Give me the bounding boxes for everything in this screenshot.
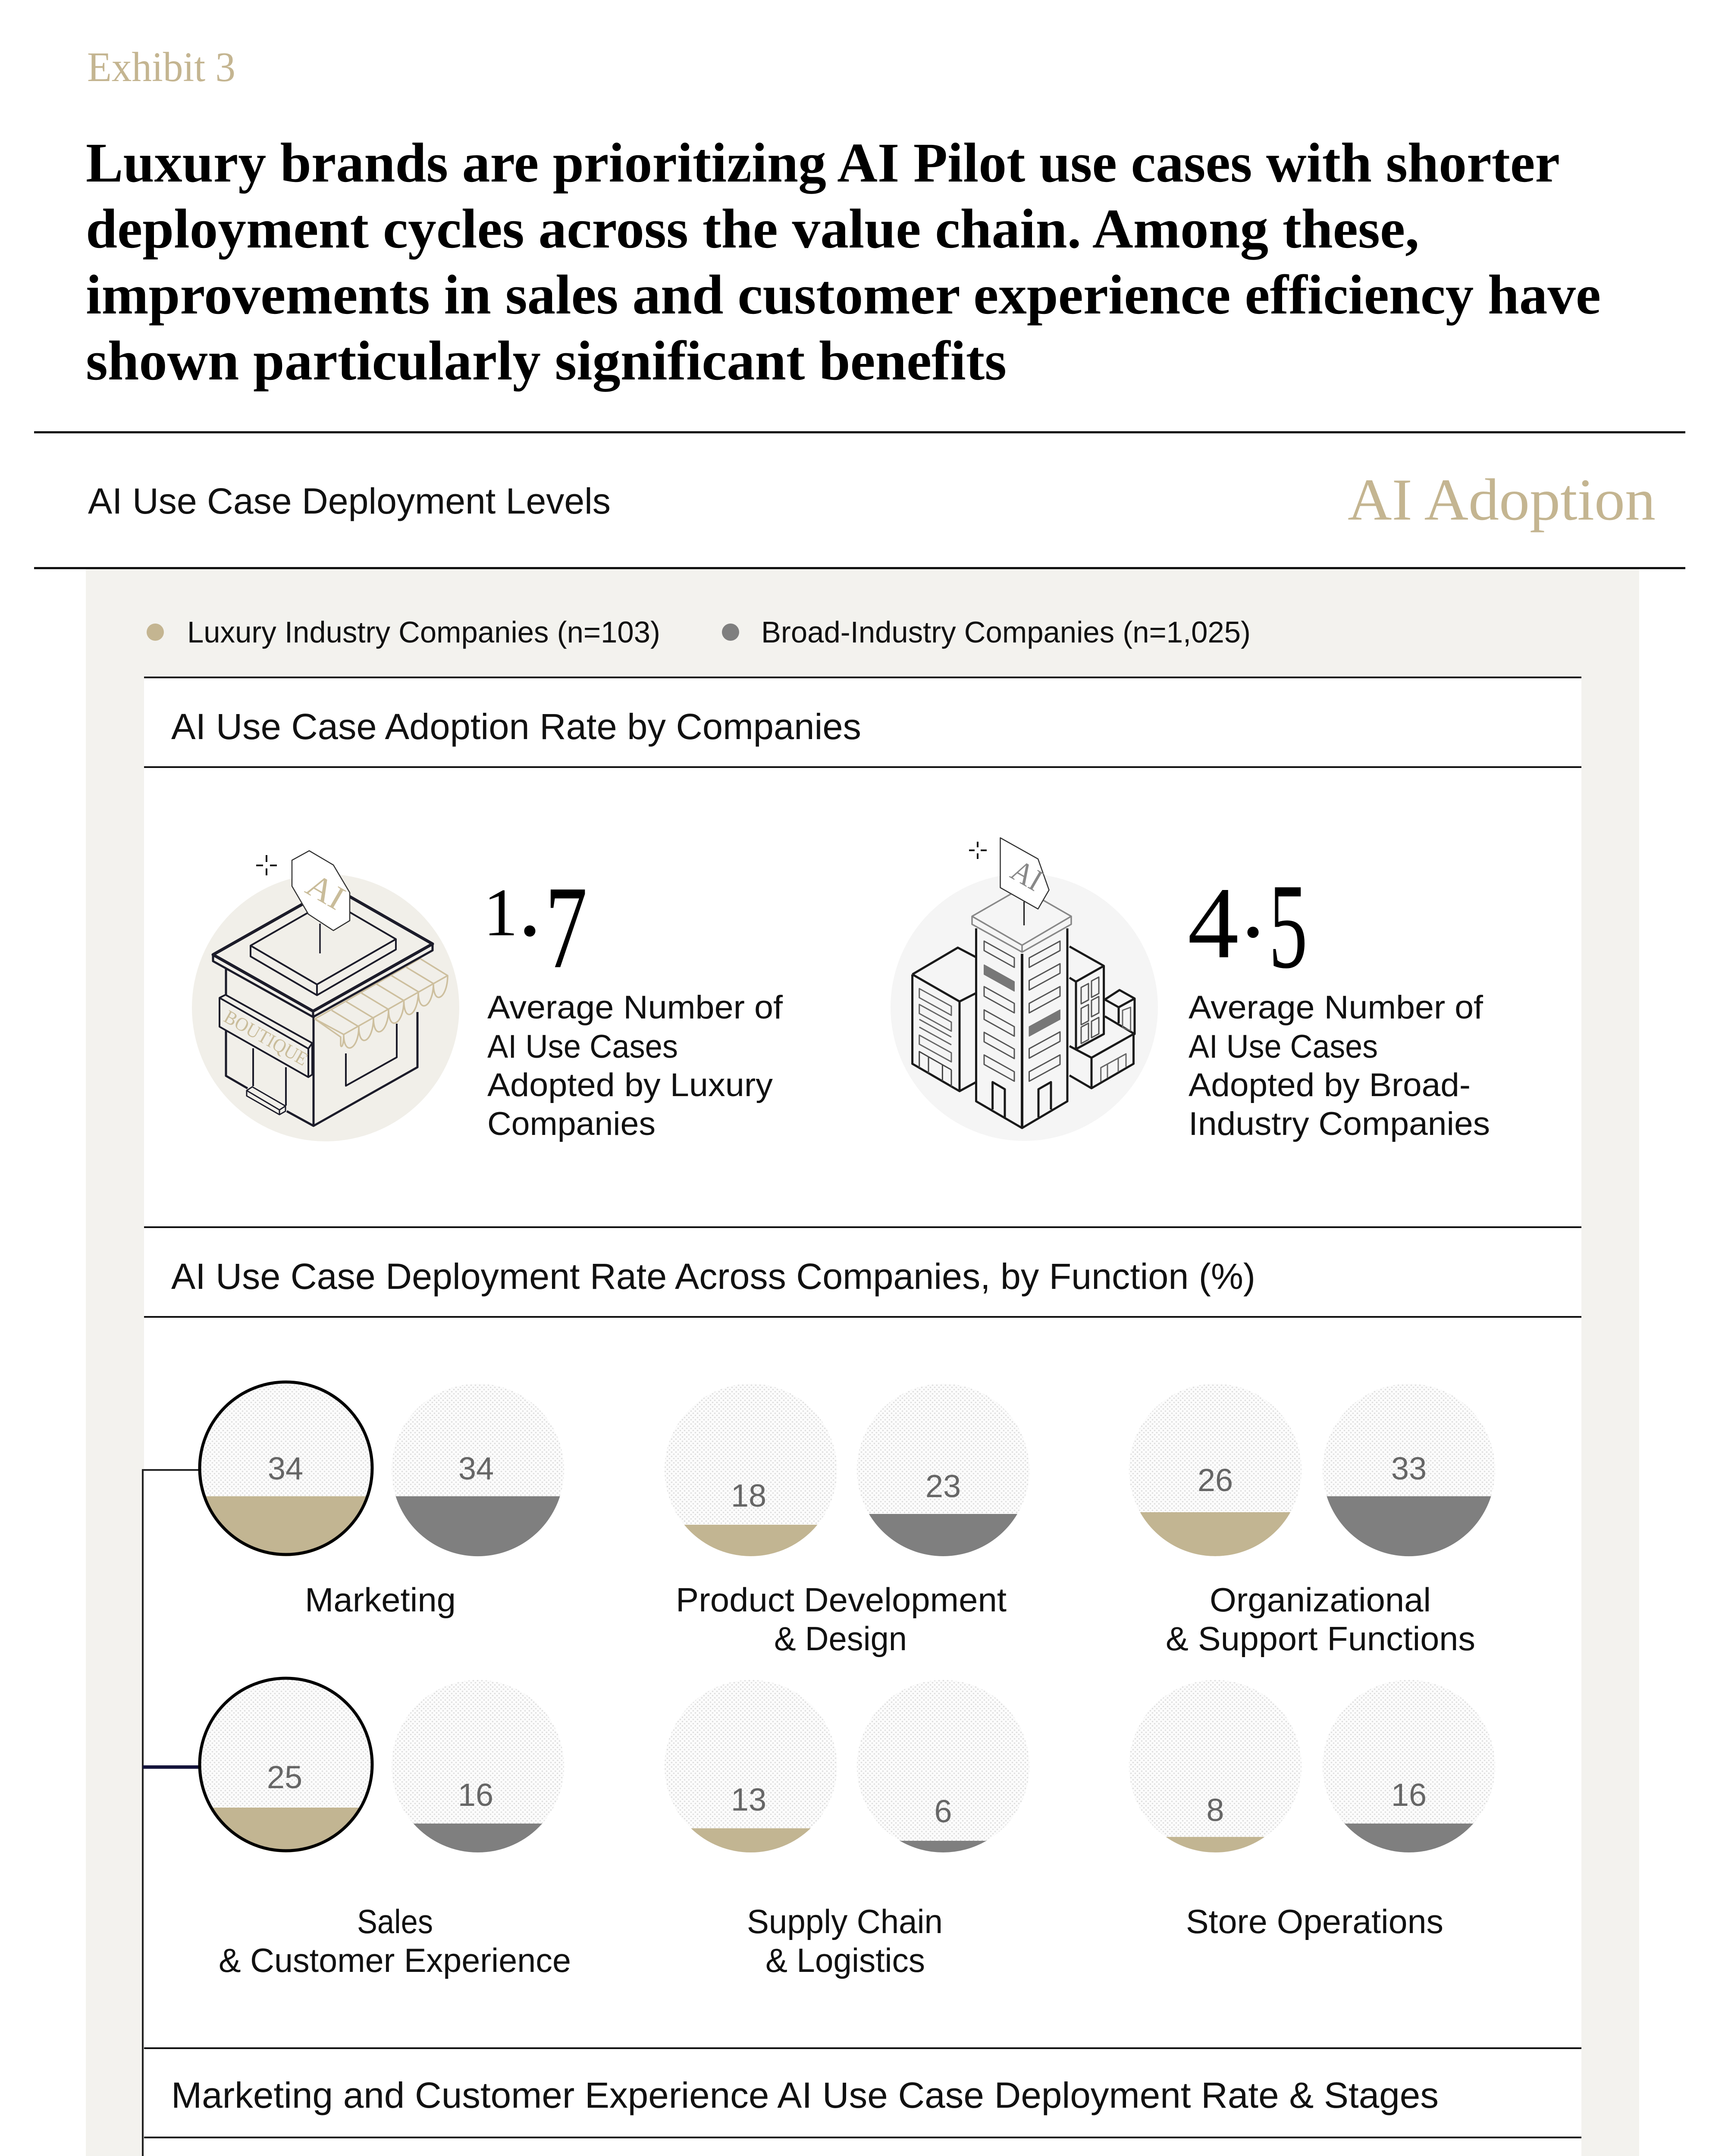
gauge: marketing broad 34 bbox=[392, 1384, 564, 1556]
number: 1.7: 1 bbox=[483, 875, 518, 950]
legend bbox=[147, 615, 1251, 649]
icon: boutique bbox=[192, 851, 459, 1141]
gauge: store luxury 8 bbox=[1129, 1680, 1302, 1852]
icon detail: left building bbox=[913, 948, 976, 1091]
heading: adoption rate: AI Use Case Adoption Rate by Companies bbox=[171, 706, 861, 747]
category tag: AI Adoption bbox=[1348, 467, 1656, 533]
icon: office towers bbox=[891, 838, 1158, 1141]
group: product development bbox=[665, 1384, 1029, 1658]
title bbox=[86, 132, 1601, 392]
gauge: product broad 23: 23 bbox=[925, 1468, 961, 1504]
number: 4.5: 5 bbox=[1269, 859, 1308, 994]
legend: broad: Broad-Industry Companies (n=1,025) bbox=[761, 615, 1251, 649]
gauge: store broad 16: 16 bbox=[1391, 1777, 1427, 1813]
gauge: sales broad 16: 16 bbox=[458, 1777, 493, 1813]
description: luxury: Adopted by Luxury bbox=[487, 1067, 773, 1103]
label: supply chain bbox=[747, 1902, 943, 1979]
number: 1.7 bbox=[483, 851, 587, 993]
description: broad: Industry Companies bbox=[1189, 1106, 1490, 1142]
title: shown particularly significant benefits bbox=[86, 330, 1007, 392]
gauge: supply broad 6 bbox=[857, 1680, 1029, 1852]
panel: white content bbox=[144, 677, 1581, 2156]
icon detail: AI sign bbox=[292, 851, 351, 931]
title: Luxury brands are prioritizing AI Pilot use cases with shorter bbox=[86, 132, 1560, 194]
heading: marketing and customer experience: Marketing and Customer Experience AI Use Case Deployment Rate & Stages bbox=[171, 2075, 1439, 2115]
gauge: sales luxury 25 bbox=[200, 1678, 372, 1852]
icon detail: boutique sign: BOUTIQUE bbox=[220, 1006, 311, 1070]
group: marketing bbox=[200, 1382, 564, 1619]
gauge: supply broad 6: 6 bbox=[934, 1793, 952, 1829]
icon detail: right buildings bbox=[1070, 946, 1135, 1088]
icon detail: door step bbox=[247, 1087, 285, 1115]
description: luxury: AI Use Cases bbox=[487, 1028, 678, 1065]
stat: broad average bbox=[1188, 852, 1490, 1142]
gauge: store broad 16 bbox=[1323, 1680, 1495, 1852]
gauge: marketing luxury 34 bbox=[200, 1382, 372, 1556]
gauge: organizational luxury 26: 26 bbox=[1198, 1462, 1233, 1498]
heading: deployment by function: AI Use Case Deployment Rate Across Companies, by Function (%) bbox=[171, 1256, 1255, 1297]
label: organizational: & Support Functions bbox=[1166, 1620, 1475, 1658]
title: deployment cycles across the value chain. Among these, bbox=[86, 198, 1419, 260]
gauge: organizational luxury 26 bbox=[1129, 1384, 1302, 1556]
title: improvements in sales and customer experience efficiency have bbox=[86, 264, 1601, 326]
gauge: product luxury 18: 18 bbox=[731, 1478, 766, 1514]
label: sales: Sales bbox=[357, 1902, 433, 1940]
icon detail: AI flag bbox=[1000, 838, 1049, 909]
gauge: marketing luxury 34: 34 bbox=[268, 1451, 303, 1486]
description: luxury: Companies bbox=[487, 1106, 656, 1142]
description: luxury: Average Number of bbox=[487, 989, 783, 1026]
label: supply chain: & Logistics bbox=[765, 1941, 925, 1979]
number: 4.5 bbox=[1188, 852, 1308, 994]
description: broad: Adopted by Broad- bbox=[1189, 1067, 1471, 1103]
icon detail: roof bbox=[213, 887, 433, 1017]
label: supply chain: Supply Chain bbox=[747, 1902, 943, 1940]
icon detail: central tower bbox=[972, 888, 1071, 1128]
description: broad: Average Number of bbox=[1189, 989, 1484, 1026]
gauge: supply luxury 13: 13 bbox=[731, 1782, 766, 1818]
gauge: organizational broad 33: 33 bbox=[1391, 1451, 1427, 1486]
label: organizational bbox=[1166, 1581, 1475, 1658]
description: broad: AI Use Cases bbox=[1189, 1028, 1378, 1065]
label: store operations: Store Operations bbox=[1186, 1902, 1443, 1940]
group: organizational bbox=[1129, 1384, 1495, 1658]
number: 4.5: 4 bbox=[1188, 867, 1239, 980]
description: luxury bbox=[487, 989, 783, 1142]
number: 4.5: . bbox=[1241, 852, 1265, 957]
gauge: supply luxury 13 bbox=[665, 1680, 837, 1852]
connector line: marketing and sales to luxury row bbox=[143, 1470, 223, 2156]
icon detail: AI flag: AI bbox=[1005, 853, 1049, 898]
group: supply chain bbox=[665, 1680, 1029, 1979]
description: broad bbox=[1189, 989, 1490, 1142]
label: product development bbox=[676, 1581, 1007, 1658]
exhibit label: Exhibit 3 bbox=[87, 44, 235, 90]
gauge: product luxury 18 bbox=[665, 1384, 837, 1556]
gauge: sales broad 16 bbox=[392, 1680, 564, 1852]
legend: luxury: Luxury Industry Companies (n=103) bbox=[187, 615, 660, 649]
stat: luxury average bbox=[483, 851, 783, 1142]
icon detail: awning bbox=[315, 959, 448, 1048]
subtitle: AI Use Case Deployment Levels bbox=[88, 481, 611, 521]
label: organizational: Organizational bbox=[1210, 1581, 1431, 1619]
panel: beige background bbox=[86, 568, 1639, 2156]
icon detail: AI sign: AI bbox=[300, 865, 351, 917]
label: sales: & Customer Experience bbox=[219, 1941, 571, 1979]
number: 1.7: 7 bbox=[545, 862, 587, 993]
gauge: marketing broad 34: 34 bbox=[458, 1451, 494, 1486]
label: marketing: Marketing bbox=[305, 1581, 456, 1619]
group: sales bbox=[200, 1678, 571, 1979]
label: sales bbox=[219, 1902, 571, 1979]
gauge: organizational broad 33 bbox=[1323, 1384, 1495, 1556]
gauge: sales luxury 25: 25 bbox=[267, 1759, 302, 1795]
gauge: product broad 23 bbox=[857, 1384, 1029, 1556]
label: product development: Product Development bbox=[676, 1581, 1007, 1619]
label: product development: & Design bbox=[774, 1620, 907, 1658]
group: store operations bbox=[1129, 1680, 1495, 1940]
gauge: store luxury 8: 8 bbox=[1206, 1792, 1224, 1828]
number: 1.7: . bbox=[518, 851, 542, 956]
